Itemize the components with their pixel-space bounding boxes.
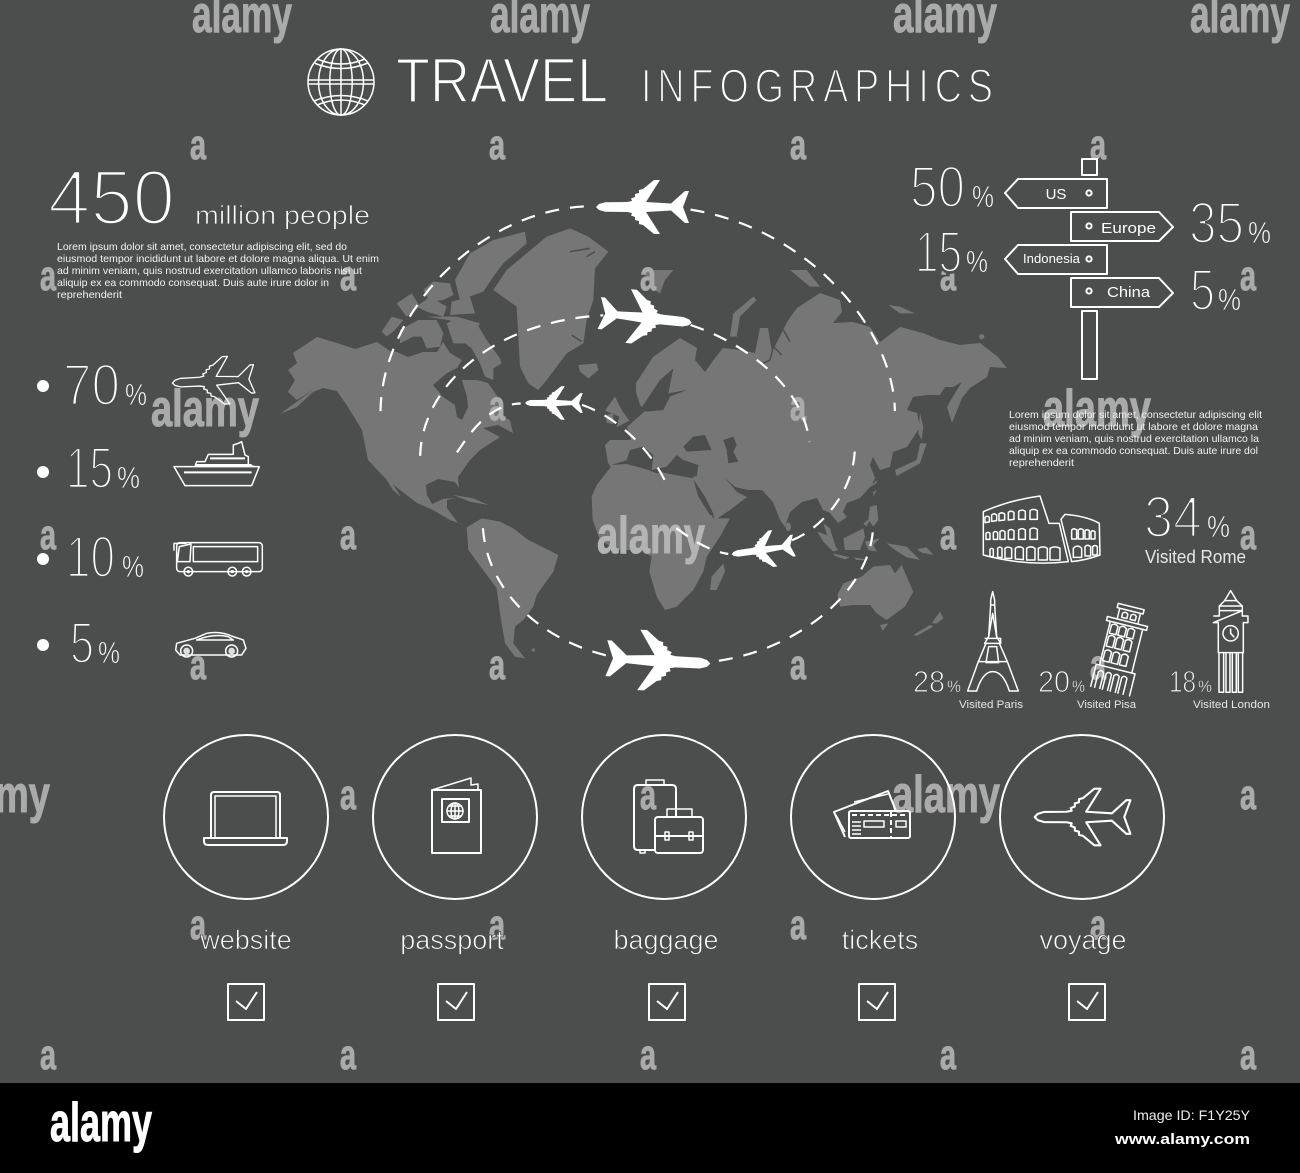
text block: ad minim veniam, quis nostrud exercitation ullamco la [1009,433,1259,445]
text block [57,241,379,301]
watermark: small a marks: a [790,121,806,168]
icon: laptop [204,792,287,845]
stat: Rome 34%: % [1207,509,1230,544]
row: plane 70% [37,353,255,418]
sign: Indonesia [1005,245,1107,274]
stat: US 50%: % [972,179,994,214]
panel: baggage [582,735,746,1020]
stat: London 18%: % [1198,677,1212,696]
sign: Europe [1071,212,1173,241]
plane: small atlantic [525,386,583,420]
arctic canada and greenland [382,228,629,427]
footer [0,1083,1300,1173]
text block: Lorem ipsum dolor sit amet, consectetur adipiscing elit [1009,409,1262,421]
watermark: large alamy marks: alamy [597,507,705,565]
logo: alamy [50,1091,152,1153]
stat: Paris 28%: Visited Paris [959,699,1024,711]
stat: Rome 34% [1144,485,1246,567]
icon: plane [1035,789,1130,845]
stat: China 5%: % [1218,282,1241,317]
panel: tickets [791,735,955,1020]
watermark: small a marks: a [640,771,656,818]
icon: globe [308,49,374,115]
watermark: small a marks: a [790,382,806,429]
row: ship 15%: % [117,460,140,495]
africa and south america [453,447,730,658]
sign: US: US [1046,186,1066,203]
label: tickets [842,925,918,955]
text block: aliquip ex ea commodo consequat. Duis aute irure dolor in [57,277,329,289]
text block: Lorem ipsum dolor sit amet, consectetur adipiscing elit, sed do [57,241,347,253]
url: www.alamy.com [1114,1131,1250,1148]
text block: eiusmod tempor incididunt ut labore et dolore magna [1009,421,1258,433]
icon: passport [432,778,481,853]
panel: landmarks [913,485,1270,711]
panel: website [164,735,328,1020]
watermark: small a marks: a [340,771,356,818]
row: car 5% [37,611,246,676]
row: bus 10%: % [122,549,144,584]
plane: middle [596,286,695,350]
north america [280,337,513,526]
landmark: eiffel tower [968,592,1018,691]
label: baggage [613,925,719,955]
stat: Europe 35%: 35 [1189,191,1244,256]
watermark: small a marks: a [40,511,56,558]
watermark: small a marks: a [1240,252,1256,299]
row: ship 15%: 15 [66,436,113,501]
russia inland seas and arctic islands [640,270,984,483]
watermark: small a marks: a [190,901,206,948]
plane: indian ocean [729,527,797,572]
text block: reprehenderit [1009,457,1074,469]
checkbox [859,984,895,1020]
stat: Indonesia 15%: 15 [915,220,962,285]
watermark: large alamy marks: alamy [892,766,1000,824]
stat: Pisa 20% [1038,664,1137,711]
watermark: small a marks: a [489,901,505,948]
southeast asia and oceania [786,490,943,636]
stat: London 18%: Visited London [1193,699,1270,711]
watermark: small a marks: a [940,252,956,299]
image id: Image ID: F1Y25Y [1133,1107,1251,1123]
watermark: small a marks: a [1240,1031,1256,1078]
stat: Pisa 20%: 20 [1038,664,1070,699]
sign: China: China [1107,284,1151,301]
sign: China [1071,278,1173,307]
stat: London 18%: 18 [1169,664,1196,699]
watermark: large alamy marks: alamy [1043,380,1151,438]
checkbox [649,984,685,1020]
watermark: small a marks: a [1090,121,1106,168]
label: passport [400,925,504,955]
heading: travel: TRAVEL [396,46,608,116]
text block: ad minim veniam, quis nostrud exercitation ullamco laboris nisi ut [57,265,362,277]
panel: transport shares [37,353,262,676]
text block: eiusmod tempor incididunt ut labore et dolore magna aliqua. Ut enim [57,253,379,265]
sign: Europe: Europe [1101,220,1156,237]
eurasia [605,293,1007,527]
row: plane 70%: 70 [63,353,120,418]
checkbox [1069,984,1105,1020]
landmark: colosseum [983,496,1100,563]
plane: bottom [605,628,712,694]
stat: US 50%: 50 [910,155,965,220]
watermark: small a marks: a [340,511,356,558]
watermark: small a marks: a [1090,901,1106,948]
watermark: small a marks: a [190,121,206,168]
watermark: small a marks: a [1240,771,1256,818]
stat: Paris 28%: % [947,677,961,696]
watermark: small a marks: a [489,121,505,168]
stat: Rome 34%: 34 [1144,485,1202,550]
world map [280,228,1007,658]
sign: US [1005,179,1107,208]
icon: baggage [634,780,703,853]
title [308,46,993,116]
stat: Paris 28%: 28 [913,664,945,699]
stat: Rome 34%: Visited Rome [1145,547,1246,567]
panel: destinations signpost [910,155,1271,469]
watermark: small a marks: a [940,511,956,558]
watermark: small a marks: a [1240,511,1256,558]
watermark: small a marks: a [40,1031,56,1078]
watermark: small a marks: a [489,641,505,688]
flight routes [381,206,895,661]
sign: Indonesia: Indonesia [1023,252,1080,266]
watermark: small a marks [40,121,1256,1078]
stat: Indonesia 15%: % [966,244,988,279]
heading: infographics: INFOGRAPHICS [641,60,993,113]
watermark: small a marks: a [940,1031,956,1078]
watermark: small a marks: a [489,382,505,429]
row: ship 15% [37,436,259,501]
watermark: small a marks: a [1090,641,1106,688]
watermark: small a marks: a [340,252,356,299]
row: car 5%: 5 [70,611,94,676]
stat: China 5% [1190,258,1241,323]
stat: Pisa 20%: Visited Pisa [1077,699,1137,711]
watermark: large alamy marks [0,0,1290,824]
text block: reprehenderit [57,289,122,301]
watermark: small a marks: a [340,1031,356,1078]
text block: aliquip ex ea commodo consequat. Duis aute irure dol [1009,445,1258,457]
plane: top [596,180,689,234]
label: million people: million people [195,200,370,230]
watermark: small a marks: a [640,1031,656,1078]
checkbox [438,984,474,1020]
stat: China 5%: 5 [1190,258,1215,323]
panel: passport [373,735,537,1020]
row: car 5%: % [98,635,120,670]
label: voyage [1039,925,1127,955]
signpost post [1082,159,1097,379]
stat: Pisa 20%: % [1072,677,1085,696]
watermark: small a marks: a [790,901,806,948]
watermark: small a marks: a [40,252,56,299]
panel: 450 million people [48,153,379,301]
row: plane 70%: % [125,377,147,412]
watermark: small a marks: a [640,252,656,299]
landmark: leaning tower of pisa [1090,602,1151,697]
watermark: large alamy marks: alamy [151,380,259,438]
stat: Europe 35%: % [1248,215,1271,250]
icon: tickets [834,791,910,838]
stat: 450: 450 [48,153,175,241]
label: website [199,925,292,955]
watermark: small a marks: a [190,641,206,688]
stat: Paris 28% [913,664,1024,711]
watermark: small a marks: a [790,641,806,688]
text block [1009,409,1262,469]
landmark: big ben [1213,591,1248,692]
stat: London 18% [1169,664,1270,711]
checkbox [228,984,264,1020]
row: bus 10% [37,525,262,590]
panel: voyage [1000,735,1164,1020]
row: bus 10%: 10 [66,525,115,590]
